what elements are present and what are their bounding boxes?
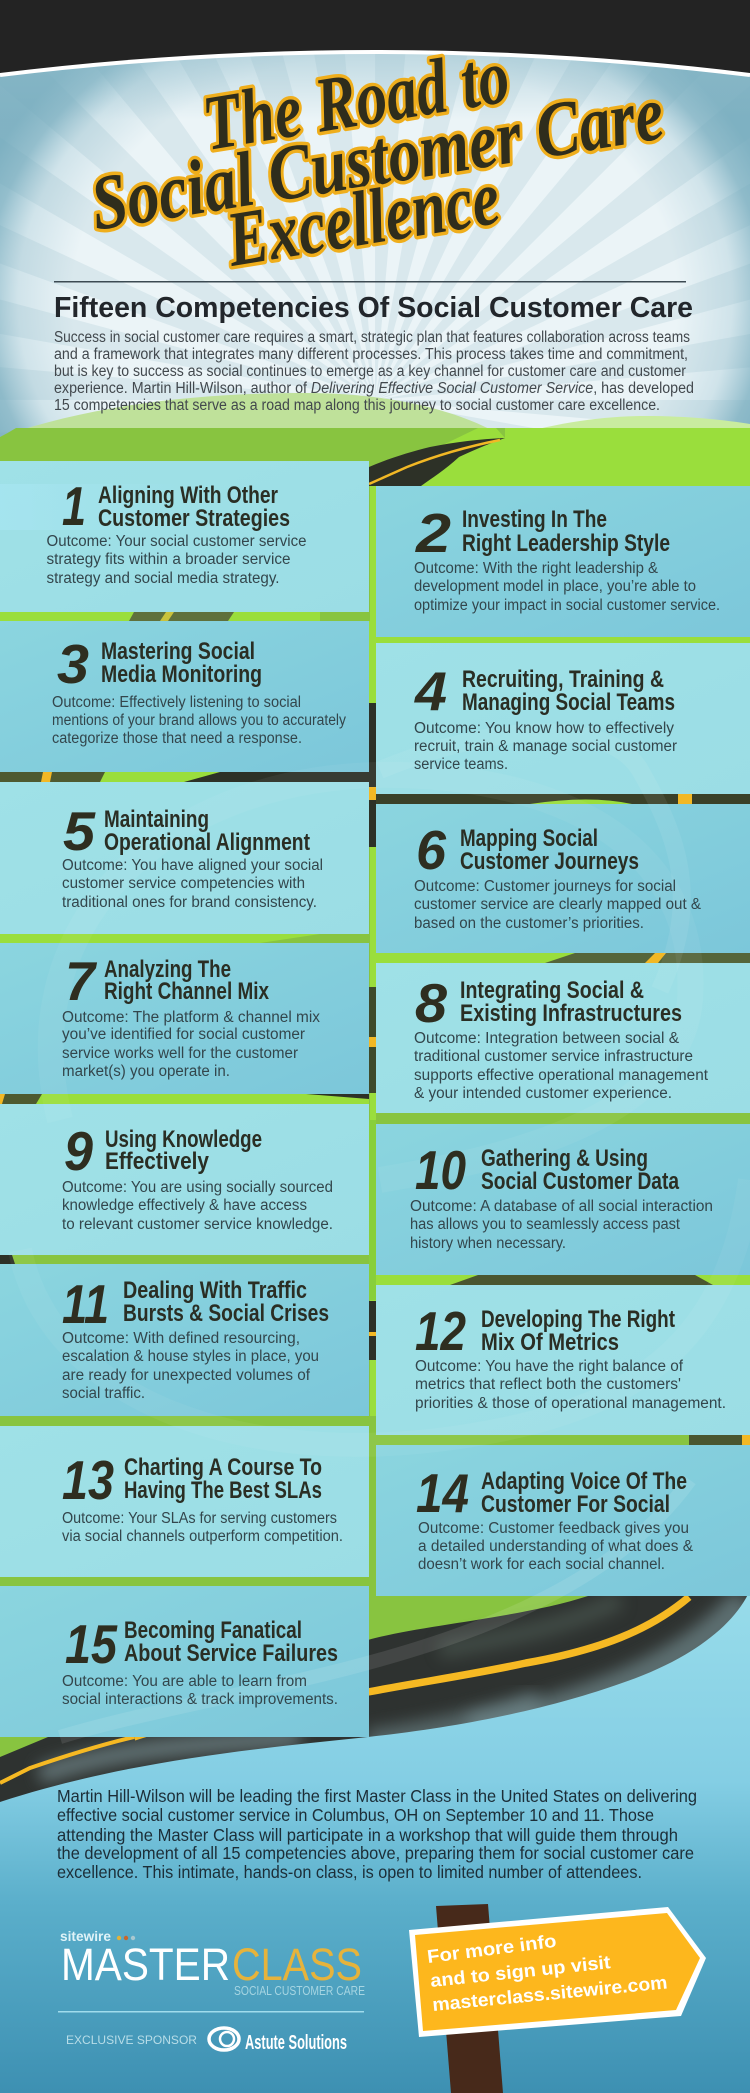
competency 8: Integrating Social & (460, 977, 644, 1004)
sitewire master class logo: MASTER (61, 1939, 230, 1990)
competency 1 (46, 475, 306, 587)
competency 15: social interactions & track improvements. (62, 1691, 338, 1708)
intro paragraph: and a framework that integrates many different processes. This process takes time and commitment, (54, 346, 688, 363)
competency 2: Right Leadership Style (462, 530, 670, 557)
competency 4: Outcome: You know how to effectively (414, 720, 674, 737)
competency 11: Bursts & Social Crises (123, 1300, 329, 1327)
competency 7: you’ve identified for social customer (62, 1026, 305, 1043)
competency 6: Outcome: Customer journeys for social (414, 878, 676, 895)
competency 1: strategy fits within a broader service (46, 551, 290, 568)
competency 4 (414, 660, 677, 773)
competency 9: knowledge effectively & have access (62, 1197, 307, 1214)
competency 11: escalation & house styles in place, you (62, 1348, 319, 1365)
competency 14: a detailed understanding of what does & (418, 1538, 694, 1555)
competency 11: are ready for unexpected volumes of (62, 1367, 311, 1384)
competency 5: Maintaining (104, 806, 209, 833)
intro paragraph: 15 competencies that serve as a road map along this journey to social customer care excellence. (54, 397, 660, 414)
competency 1: Aligning With Other (98, 482, 278, 509)
competency 5: Outcome: You have aligned your social (62, 857, 323, 874)
sitewire master class logo (60, 1928, 365, 1998)
competency 11: Outcome: With defined resourcing, (62, 1330, 300, 1347)
master class paragraph: the development of all 15 competencies above, preparing them for social customer care (57, 1843, 694, 1863)
competency 9: 9 (64, 1120, 93, 1182)
competency 15 (62, 1613, 338, 1708)
right column panels (376, 486, 750, 1596)
competency 7: market(s) you operate in. (62, 1063, 230, 1080)
competency 10: history when necessary. (410, 1235, 566, 1252)
competency 3: Outcome: Effectively listening to social (52, 694, 301, 711)
competency 14: Adapting Voice Of The (481, 1468, 687, 1495)
master class paragraph: attending the Master Class will participate in a workshop that will guide them through (57, 1825, 678, 1845)
competency 8 (414, 972, 709, 1102)
competency 10 (410, 1139, 713, 1252)
dark top band (0, 0, 750, 90)
hills above the horizon (0, 393, 750, 440)
competency 13 (62, 1449, 343, 1545)
competency 1: Customer Strategies (98, 505, 290, 532)
competency 13: via social channels outperform competition. (62, 1528, 343, 1545)
competency 9 (62, 1120, 333, 1233)
competency 15: Becoming Fanatical (124, 1617, 302, 1644)
hero sunburst background (0, 54, 750, 437)
competency 2: optimize your impact in social customer service. (414, 597, 720, 614)
divider under title (54, 281, 686, 282)
competency 5 (62, 800, 323, 911)
competency 2: Investing In The (462, 506, 607, 533)
competency 8: traditional customer service infrastructure (414, 1048, 693, 1065)
competency 14: Outcome: Customer feedback gives you (418, 1520, 689, 1537)
competency 4: service teams. (414, 756, 508, 773)
competency 3: 3 (57, 633, 89, 695)
competency 3 (52, 633, 346, 747)
competency 8: Outcome: Integration between social & (414, 1030, 680, 1047)
competency 8: Existing Infrastructures (460, 1000, 682, 1027)
competency 3: mentions of your brand allows you to accurately (52, 712, 346, 729)
competency 9: Using Knowledge (105, 1126, 262, 1153)
competency 14: Customer For Social (481, 1491, 670, 1518)
competency 13: Charting A Course To (124, 1454, 322, 1481)
competency 12: Mix Of Metrics (481, 1329, 619, 1356)
competency 4: 4 (414, 660, 447, 722)
competency 6: customer service are clearly mapped out & (414, 896, 702, 913)
competency 2: Outcome: With the right leadership & (414, 560, 659, 577)
competency 12: priorities & those of operational management. (415, 1395, 726, 1412)
competency 7: Right Channel Mix (104, 978, 270, 1005)
competency 12: 12 (415, 1300, 466, 1362)
competency 5: Operational Alignment (104, 829, 310, 856)
competency 1: 1 (62, 475, 86, 537)
master class paragraph: Martin Hill-Wilson will be leading the first Master Class in the United States on delivering (57, 1786, 697, 1806)
competency 3: categorize those that need a response. (52, 730, 302, 747)
competency 5: 5 (63, 800, 96, 862)
competency 2 (414, 502, 720, 614)
competency 15: Outcome: You are able to learn from (62, 1673, 307, 1690)
competency 1: Outcome: Your social customer service (46, 533, 306, 550)
green landscape (0, 428, 750, 1800)
competency 12: Developing The Right (481, 1306, 675, 1333)
competency 10: Social Customer Data (481, 1168, 680, 1195)
sky at the bottom (0, 1590, 750, 2093)
left column panels (0, 461, 369, 1737)
competency 6: based on the customer’s priorities. (414, 915, 644, 932)
title: The Road to (197, 32, 515, 167)
sitewire master class logo: SOCIAL CUSTOMER CARE (234, 1984, 365, 1998)
competency 8: & your intended customer experience. (414, 1085, 672, 1102)
intro paragraph (54, 329, 694, 414)
master class paragraph (57, 1786, 697, 1882)
master class paragraph: effective social customer service in Columbus, OH on September 10 and 11. Those (57, 1805, 654, 1825)
competency 2: development model in place, you’re able to (414, 578, 696, 595)
competency 13: 13 (62, 1449, 114, 1511)
exclusive sponsor: Astute Solutions (245, 2032, 347, 2054)
exclusive sponsor (66, 2028, 347, 2054)
competency 6: Customer Journeys (460, 848, 639, 875)
competency 13: Having The Best SLAs (124, 1477, 322, 1504)
competency 10: has allows you to seamlessly access past (410, 1216, 681, 1233)
logo divider (58, 2011, 364, 2012)
competency 10: Outcome: A database of all social interaction (410, 1198, 713, 1215)
competency 9: to relevant customer service knowledge. (62, 1216, 333, 1233)
competency 4: Recruiting, Training & (462, 666, 664, 693)
competency 14 (416, 1462, 694, 1573)
subheading: Fifteen Competencies Of Social Customer Care (54, 292, 693, 324)
competency 11: Dealing With Traffic (123, 1277, 307, 1304)
competency 7: Analyzing The (104, 956, 231, 983)
competency 13: Outcome: Your SLAs for serving customers (62, 1510, 337, 1527)
exclusive sponsor: EXCLUSIVE SPONSOR (66, 2035, 197, 2047)
competency 7: 7 (65, 950, 97, 1012)
intro paragraph: but is key to success as social continues to emerge as a key channel for customer care and customer (54, 363, 686, 380)
competency 1: strategy and social media strategy. (46, 570, 280, 587)
competency 5: customer service competencies with (62, 875, 305, 892)
competency 6 (414, 819, 702, 932)
competency 7 (62, 950, 320, 1080)
signpost (409, 1904, 706, 2093)
translucent swirl ribbons (0, 484, 750, 1737)
competency 6: Mapping Social (460, 825, 598, 852)
road segments in gaps between panels (0, 612, 750, 1445)
signpost: masterclass.sitewire.com (431, 1971, 668, 2015)
road at the top (369, 438, 505, 486)
title: Excellence (220, 153, 505, 283)
competency 6: 6 (416, 819, 446, 881)
competency 11 (62, 1273, 329, 1402)
competency 12: metrics that reflect both the customers' (415, 1376, 681, 1393)
competency 14: doesn’t work for each social channel. (418, 1556, 665, 1573)
competency 15: About Service Failures (124, 1640, 338, 1667)
competency 5: traditional ones for brand consistency. (62, 894, 317, 911)
competency 8: 8 (415, 972, 447, 1034)
signpost: and to sign up visit (429, 1951, 611, 1991)
competency 3: Mastering Social (101, 638, 255, 665)
sitewire master class logo: CLASS (232, 1939, 362, 1990)
competency 11: 11 (62, 1273, 109, 1335)
master class paragraph: excellence. This intimate, hands-on class, is open to limited number of attendees. (57, 1862, 642, 1882)
competency 7: service works well for the customer (62, 1045, 298, 1062)
competency 4: recruit, train & manage social customer (414, 738, 677, 755)
signpost: For more info (426, 1930, 557, 1967)
competency 2: 2 (415, 502, 451, 564)
competency 10: 10 (415, 1139, 466, 1201)
competency 7: Outcome: The platform & channel mix (62, 1009, 320, 1026)
competency 3: Media Monitoring (101, 661, 262, 688)
white arc (0, 52, 750, 75)
sitewire master class logo: sitewire (60, 1928, 111, 1944)
competency 9: Effectively (105, 1148, 210, 1175)
competency 12: Outcome: You have the right balance of (415, 1358, 684, 1375)
competency 14: 14 (416, 1462, 469, 1524)
competency 11: social traffic. (62, 1385, 145, 1402)
competency 10: Gathering & Using (481, 1145, 648, 1172)
competency 9: Outcome: You are using socially sourced (62, 1179, 333, 1196)
competency 12 (415, 1300, 726, 1412)
intro paragraph: experience. Martin Hill-Wilson, author of Delivering Effective Social Customer Service, has developed (54, 380, 694, 397)
big road curve (0, 1596, 750, 1810)
competency 8: supports effective operational management (414, 1067, 709, 1084)
competency 15: 15 (65, 1613, 118, 1675)
competency 4: Managing Social Teams (462, 689, 675, 716)
